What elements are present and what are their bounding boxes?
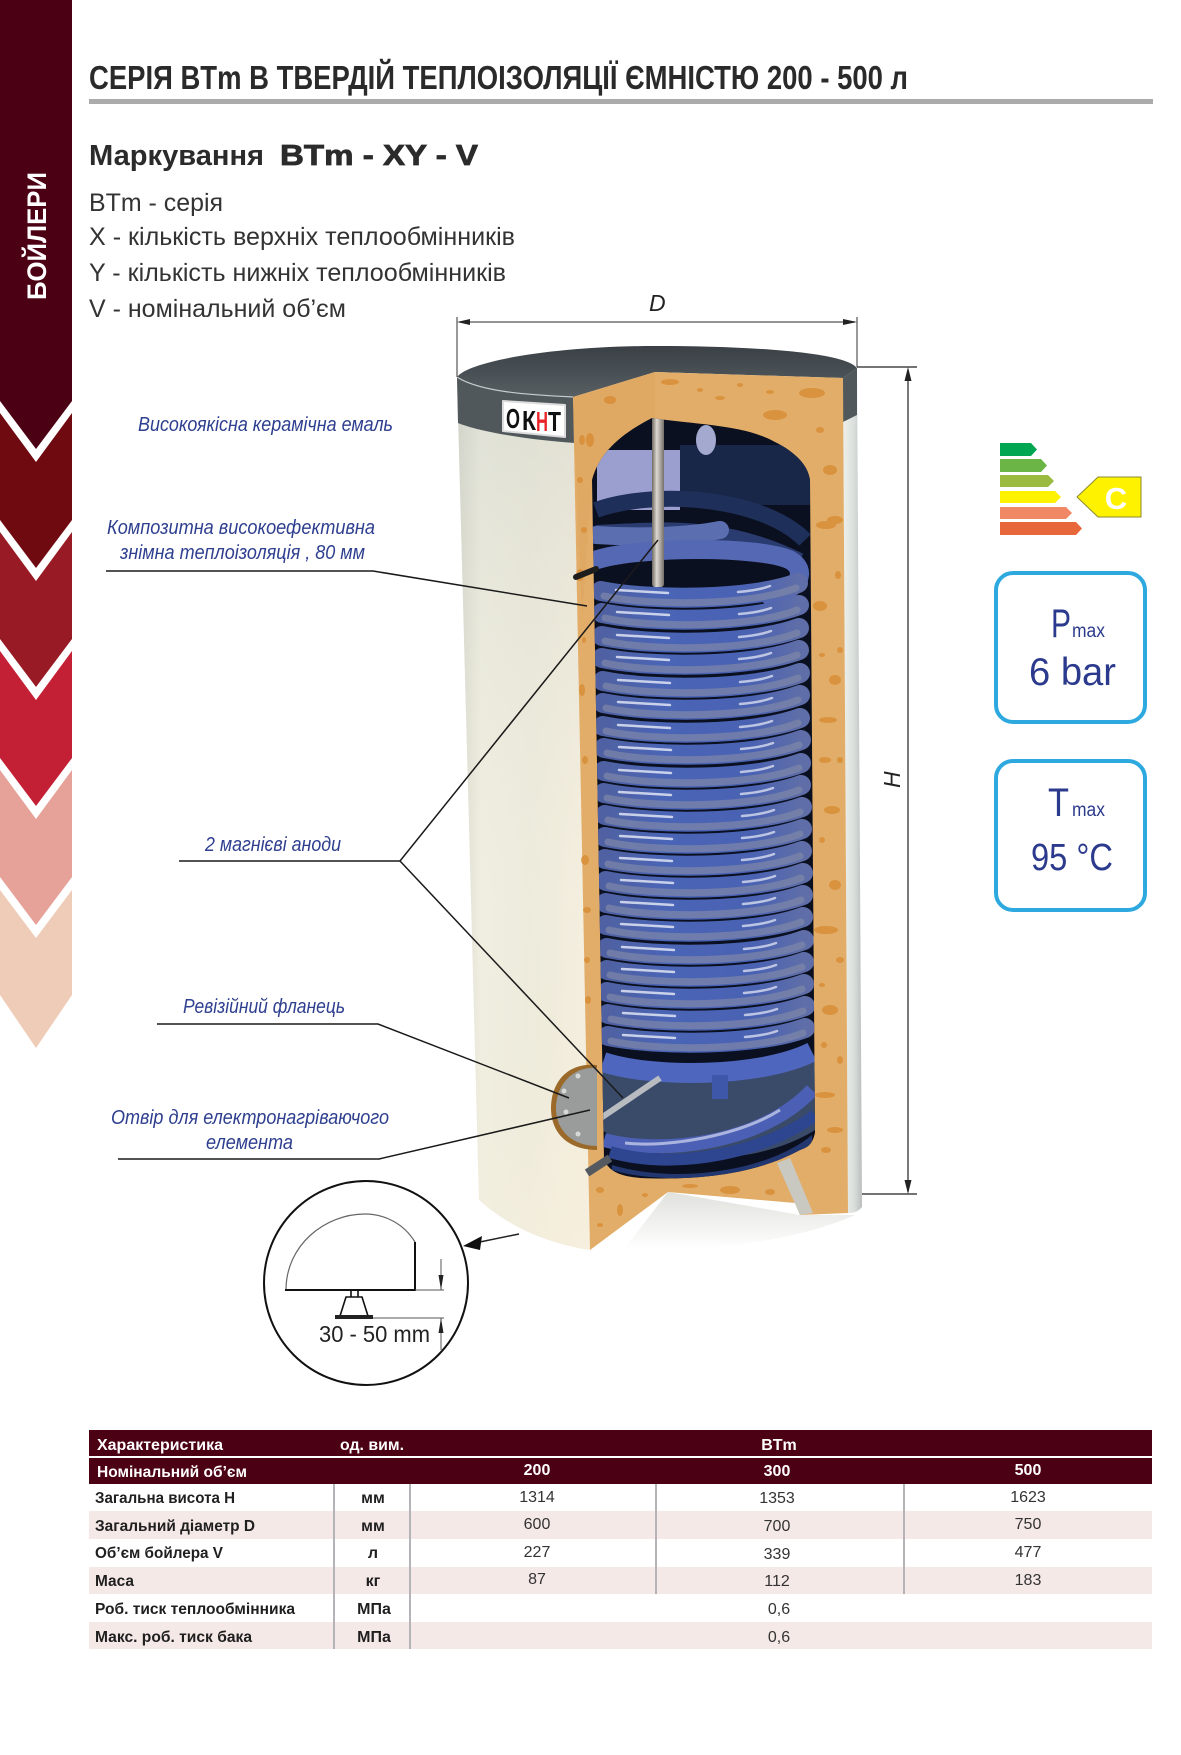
table row backgrounds: [89, 1430, 1152, 1649]
table row labels: Об’єм бойлера V: [95, 1545, 223, 1562]
table units: мм: [361, 1490, 385, 1507]
table header: 300: [764, 1463, 790, 1480]
inspection flange: [551, 1065, 597, 1150]
table header: Характеристика: [97, 1437, 223, 1454]
table values: 700: [764, 1518, 790, 1535]
table units: мм: [361, 1518, 385, 1535]
table values: 0,6: [768, 1629, 790, 1646]
dome sketch: [286, 1214, 415, 1290]
table units: МПа: [357, 1601, 391, 1618]
dimension H: H: [879, 771, 905, 788]
sidebar label: БОЙЛЕРИ: [21, 172, 52, 300]
dimension D: [457, 290, 857, 377]
table units: л: [368, 1545, 378, 1562]
lower coil highlight: [625, 1110, 780, 1144]
table values: 183: [1015, 1572, 1041, 1589]
brand plate: К: [522, 405, 537, 436]
upper tank back: [680, 445, 810, 505]
table values: 1353: [759, 1490, 795, 1507]
table column dividers: [333, 1484, 905, 1649]
callout: anodes: 2 магнієві аноди: [204, 834, 341, 856]
table row labels: Загальна висота Н: [95, 1490, 235, 1507]
table header: [97, 1437, 1041, 1481]
coil turn: [596, 550, 800, 596]
tank interior: [592, 418, 815, 1178]
callout: ceramic enamel: Високоякісна керамічна емаль: [138, 414, 393, 436]
lower coil loop: [604, 1090, 812, 1146]
table row labels: [95, 1490, 295, 1646]
marking legend list: Y - кількість нижніх теплообмінників: [89, 259, 506, 287]
panel: max temperature: 95 °C: [1031, 837, 1113, 879]
panel: max temperature: [996, 761, 1145, 910]
specifications table: [89, 1430, 1152, 1649]
dimension D: D: [649, 290, 666, 316]
detail circle: foot clearance: 30 - 50 mm: [319, 1321, 430, 1347]
rim highlight: [457, 377, 573, 397]
table units: МПа: [357, 1629, 391, 1646]
table row labels: Маса: [95, 1573, 134, 1590]
tank body shell: [457, 377, 590, 1250]
flange plate: [556, 1068, 597, 1146]
table row labels: Роб. тиск теплообмінника: [95, 1601, 295, 1618]
table values: 477: [1015, 1544, 1041, 1561]
marking heading: [89, 140, 479, 172]
callout: flange: [157, 996, 569, 1098]
floor shadow: [625, 1192, 855, 1250]
callout: heating element opening: елемента: [206, 1132, 293, 1154]
table values: 87: [528, 1571, 546, 1588]
marking heading: BTm - XY - V: [280, 140, 479, 172]
bottom bowl: [600, 1055, 815, 1158]
top port: [576, 569, 596, 577]
brand plate: Т: [548, 406, 561, 437]
table header: 500: [1015, 1462, 1041, 1479]
marking legend list: X - кількість верхніх теплообмінників: [89, 223, 515, 251]
boiler illustration: [457, 346, 862, 1250]
title: СЕРІЯ BTm В ТВЕРДІЙ ТЕПЛОІЗОЛЯЦІЇ ЄМНІСТЮ 200 - 500 л: [89, 58, 908, 96]
table values: 1314: [519, 1489, 555, 1506]
table header: од. вим.: [340, 1437, 404, 1454]
heating element rod: [595, 1078, 660, 1122]
table values: 0,6: [768, 1601, 790, 1618]
table units: кг: [366, 1573, 381, 1590]
foam back edge: [573, 372, 655, 620]
right side shell: [843, 368, 862, 1213]
last coil row: [603, 1052, 812, 1073]
callout: insulation: знімна теплоізоляція , 80 мм: [119, 542, 365, 564]
sidebar ribbon with chevrons: [0, 0, 72, 1048]
dark rim band left: [457, 377, 575, 443]
table values: 112: [764, 1573, 790, 1590]
body vertical shading: [457, 377, 590, 1250]
detail circle: foot clearance: [264, 1181, 468, 1385]
marking legend list: BTm - серія: [89, 189, 223, 217]
panel: max temperature: max: [1072, 800, 1105, 821]
marking legend list: [89, 189, 515, 323]
panel: max pressure: P: [1051, 602, 1071, 646]
table values: 600: [524, 1516, 550, 1533]
table values: [519, 1489, 1046, 1646]
anode rod: [652, 402, 664, 587]
table values: 227: [524, 1544, 550, 1561]
dimension H: [857, 367, 917, 1194]
table row labels: Макс. роб. тиск бака: [95, 1629, 252, 1646]
callout: heating element opening: [111, 1107, 590, 1159]
table header: 200: [524, 1462, 550, 1479]
energy class icon: [1000, 443, 1141, 535]
upper dark coil: [596, 499, 805, 540]
table header: Номінальний об’єм: [97, 1464, 247, 1481]
table header: BTm: [761, 1437, 797, 1454]
dark top lid: [457, 346, 857, 397]
support leg: [777, 1158, 813, 1215]
callout: flange: Ревізійний фланець: [183, 996, 345, 1018]
panel: max pressure: 6 bar: [1029, 651, 1116, 694]
bottom drain port: [587, 1158, 610, 1173]
foam speckles: [576, 379, 844, 1227]
coil rows: [601, 583, 805, 1048]
callout: anodes: [179, 540, 658, 1098]
callout: heating element opening: Отвір для електронагріваючого: [111, 1107, 389, 1129]
flange foam ring: [551, 1065, 597, 1150]
callout: insulation: [106, 517, 587, 606]
table values: 1623: [1010, 1489, 1046, 1506]
brand plate: О: [506, 403, 520, 434]
panel: max pressure: [996, 573, 1145, 722]
second lower coil: [610, 1115, 815, 1160]
panel: max pressure: max: [1072, 621, 1105, 642]
marking heading: Маркування: [89, 140, 264, 172]
table values: 750: [1015, 1516, 1041, 1533]
fitting: [696, 425, 716, 455]
top tube: [596, 530, 720, 536]
insulation foam: [573, 372, 848, 1250]
tank bottom: [612, 1135, 812, 1178]
table values: 339: [764, 1546, 790, 1563]
table units: [357, 1490, 391, 1646]
dark rim band right: [843, 368, 857, 422]
callout: insulation: Композитна високоефективна: [107, 517, 375, 539]
element bracket: [712, 1075, 728, 1099]
panel: max temperature: T: [1048, 781, 1069, 825]
brand plate: [503, 401, 565, 437]
energy class C marker: [1077, 477, 1141, 517]
energy class icon: C: [1105, 481, 1127, 516]
heat exchanger coil and internals: [595, 402, 815, 1178]
arrow to detail circle: [463, 1234, 519, 1250]
foot sketch: [340, 1290, 368, 1316]
dimension lines: [373, 1259, 444, 1350]
marking legend list: V - номінальний об’єм: [89, 295, 346, 323]
brand plate: Н: [536, 406, 548, 437]
table row labels: Загальний діаметр D: [95, 1518, 255, 1535]
light panel behind coil: [597, 450, 680, 510]
